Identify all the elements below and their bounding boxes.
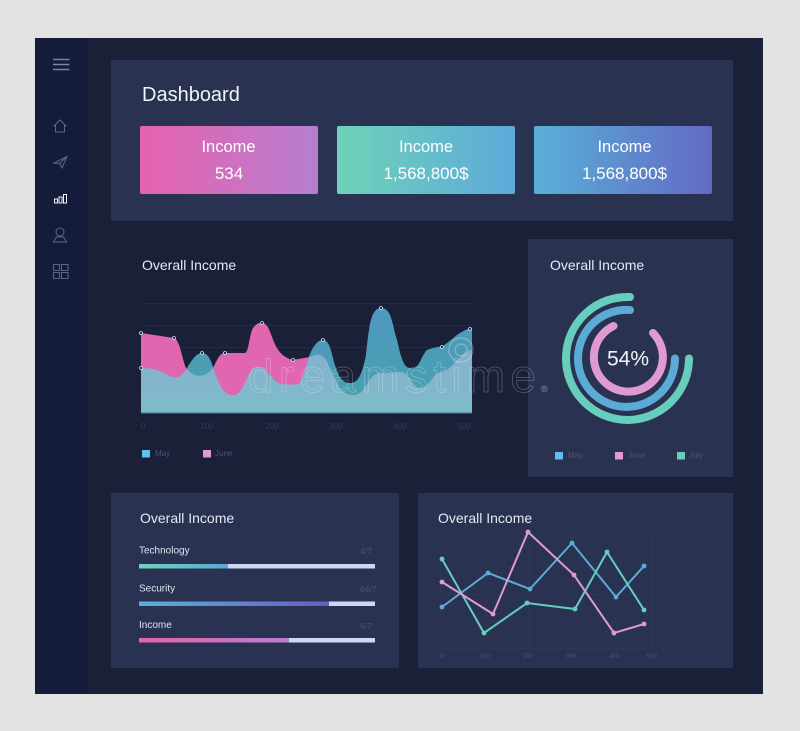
watermark: ® bbox=[541, 384, 548, 394]
icon: bars bbox=[54, 194, 66, 203]
card: income 534: Income bbox=[201, 138, 256, 156]
bar: technology bbox=[139, 546, 375, 568]
panel: donut bbox=[528, 239, 733, 477]
card: income blue: Income bbox=[597, 138, 652, 156]
area chart axis labels: 300 bbox=[329, 422, 343, 431]
donut legend: July bbox=[689, 451, 703, 460]
bar: income: Income bbox=[139, 620, 172, 631]
bar: income bbox=[139, 620, 375, 642]
card: income teal: Income bbox=[399, 138, 453, 156]
panel: area chart bbox=[140, 257, 472, 458]
line chart axis labels: 0 bbox=[440, 654, 444, 660]
line chart axis labels: 200 bbox=[523, 654, 534, 660]
area chart axis labels: 0 bbox=[141, 422, 146, 431]
area chart legend bbox=[142, 449, 233, 458]
bar: technology: 4/7 bbox=[360, 546, 372, 556]
donut legend bbox=[555, 451, 703, 460]
line chart title: Overall Income bbox=[438, 510, 532, 526]
bar: security: 84/7 bbox=[360, 584, 377, 594]
area chart axis labels: 100 bbox=[200, 422, 214, 431]
card: income teal bbox=[337, 126, 515, 194]
donut title: Overall Income bbox=[550, 257, 644, 273]
area chart axis labels: 400 bbox=[393, 422, 407, 431]
donut legend: June bbox=[628, 451, 646, 460]
area chart bbox=[140, 306, 472, 413]
line chart axis labels: 400 bbox=[609, 654, 620, 660]
icon: menu bbox=[53, 60, 70, 70]
donut value: 54% bbox=[607, 348, 649, 370]
sidebar bbox=[35, 38, 88, 694]
icon: home bbox=[54, 120, 66, 132]
card: income blue: 1,568,800$ bbox=[582, 164, 668, 183]
area chart axis labels: 200 bbox=[265, 422, 279, 431]
area chart legend: June bbox=[215, 449, 233, 458]
icon: grid bbox=[54, 264, 68, 278]
watermark: dreamstime bbox=[248, 350, 536, 402]
panel: line chart bbox=[418, 493, 733, 668]
bar: income: 6/7 bbox=[360, 621, 372, 631]
line chart axis labels: 300 bbox=[566, 654, 577, 660]
card: income 534: 534 bbox=[215, 164, 243, 183]
area chart axis labels bbox=[141, 422, 471, 431]
line chart axis labels: 500 bbox=[647, 654, 658, 660]
progress title: Overall Income bbox=[140, 510, 234, 526]
panel: header bbox=[111, 60, 733, 221]
donut chart bbox=[566, 297, 689, 420]
donut legend: May bbox=[568, 451, 583, 460]
icon: paper plane bbox=[54, 156, 67, 168]
line chart axis labels bbox=[440, 654, 658, 660]
bar: technology: Technology bbox=[139, 546, 190, 556]
heading: Dashboard: Dashboard bbox=[142, 84, 240, 106]
bar: security bbox=[139, 584, 377, 606]
area chart title: Overall Income bbox=[142, 257, 236, 273]
card: income blue bbox=[534, 126, 712, 194]
icon: person bbox=[54, 228, 66, 242]
panel: progress bars bbox=[111, 493, 399, 668]
line chart bbox=[440, 530, 652, 649]
line chart axis labels: 100 bbox=[480, 654, 491, 660]
area chart axis labels: 500 bbox=[457, 422, 471, 431]
area chart legend: May bbox=[155, 449, 170, 458]
card: income teal: 1,568,800$ bbox=[383, 164, 469, 183]
bar: security: Security bbox=[139, 584, 175, 594]
card: income 534 bbox=[140, 126, 318, 194]
